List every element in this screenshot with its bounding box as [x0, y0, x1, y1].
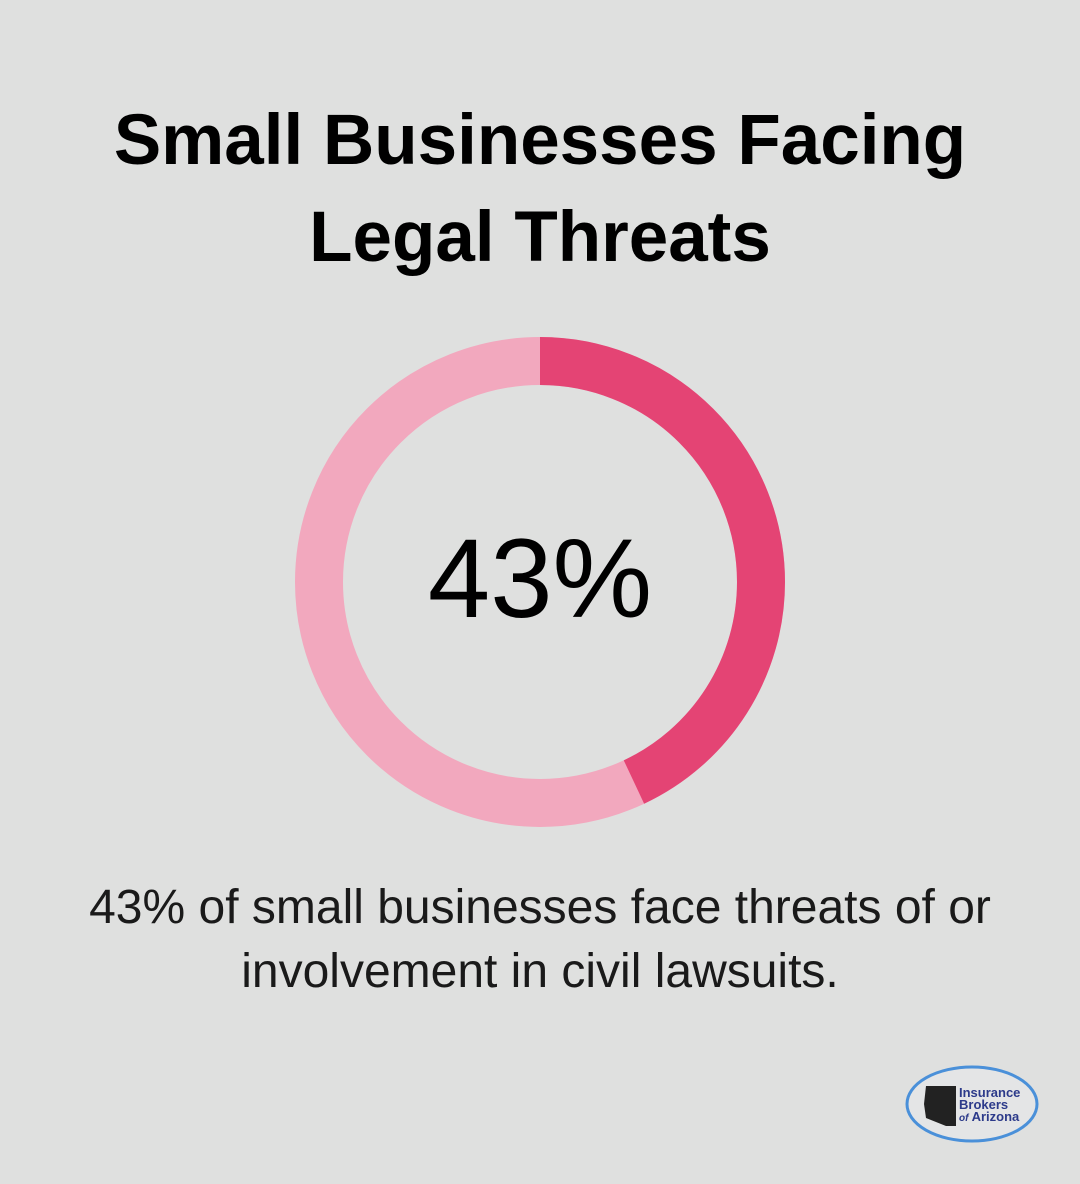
- logo: of Arizona: [959, 1109, 1020, 1124]
- caption: 43% of small businesses face threats of or: [89, 881, 991, 934]
- logo: [906, 1066, 1038, 1142]
- title: [114, 101, 966, 277]
- logo: Insurance: [959, 1085, 1020, 1100]
- title: Small Businesses Facing: [114, 101, 966, 180]
- title: Legal Threats: [309, 198, 771, 277]
- caption: [89, 881, 991, 998]
- logo: Brokers: [959, 1097, 1008, 1112]
- caption: involvement in civil lawsuits.: [241, 945, 839, 998]
- donut chart: 43%: [428, 516, 652, 641]
